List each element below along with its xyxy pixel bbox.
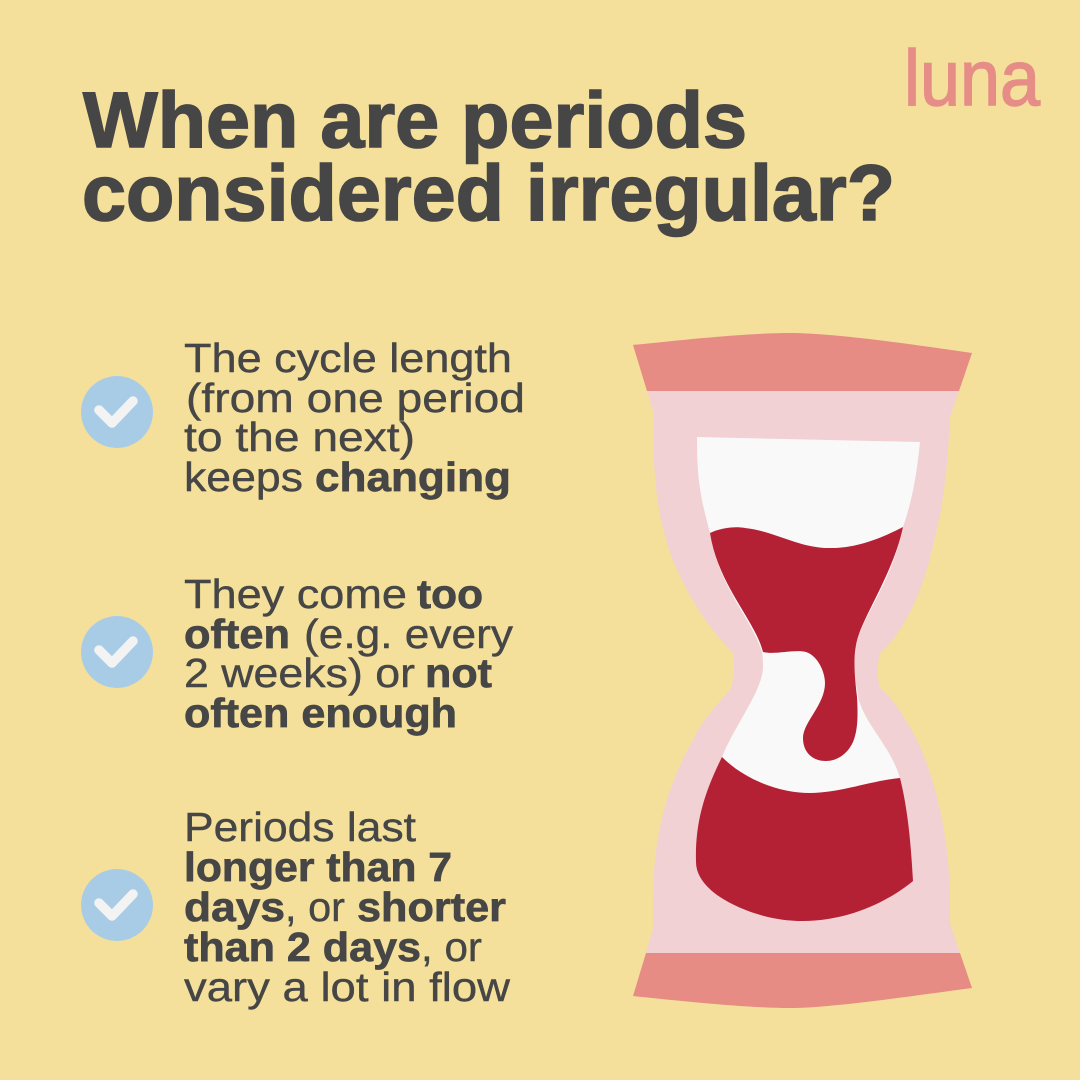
text block: cycle length: (from one period	[186, 375, 525, 421]
hourglass top cap	[633, 333, 972, 391]
text block: frequency: often	[184, 611, 290, 657]
hourglass bottom cap	[633, 953, 972, 1008]
icon: check badge 1	[81, 376, 153, 448]
text block: cycle length: keeps	[184, 454, 303, 500]
text block: cycle length	[184, 335, 525, 500]
glass interior	[697, 437, 920, 810]
text block: duration and flow: days	[184, 884, 285, 930]
text block: frequency: (e.g. every	[304, 611, 514, 657]
text block: duration and flow: , or	[421, 924, 482, 970]
text block: duration and flow: Periods last	[184, 804, 417, 850]
text block: duration and flow: , or	[285, 884, 345, 930]
icon: check badge 3	[81, 869, 153, 941]
list item: cycle length	[81, 335, 525, 500]
text block: cycle length: The cycle length	[184, 335, 512, 381]
hourglass illustration	[633, 333, 972, 1008]
title: considered irregular?	[82, 148, 895, 237]
list item: duration and flow	[81, 804, 510, 1010]
icon: check badge 2	[81, 616, 153, 688]
text block: duration and flow: longer than 7	[184, 844, 452, 890]
text block: duration and flow: vary a lot in flow	[184, 964, 510, 1010]
text block: cycle length: changing	[315, 454, 511, 500]
list item: frequency	[81, 571, 514, 736]
text block: frequency: 2 weeks) or	[184, 650, 415, 696]
logo: luna: luna	[904, 33, 1040, 122]
text block: frequency	[184, 571, 514, 736]
text block: frequency: often enough	[184, 690, 457, 736]
title	[82, 75, 895, 237]
text block: duration and flow	[184, 804, 510, 1010]
text block: duration and flow: than 2 days	[184, 924, 421, 970]
text block: frequency: too	[417, 571, 483, 617]
text block: frequency: not	[425, 650, 492, 696]
text block: duration and flow: shorter	[357, 884, 506, 930]
sand: upper with falling drop	[710, 527, 903, 761]
text block: cycle length: to the next)	[184, 414, 415, 460]
text block: frequency: They come	[184, 571, 407, 617]
title: When are periods	[83, 75, 747, 164]
sand: lower pile	[696, 757, 913, 921]
hourglass body	[646, 391, 960, 953]
